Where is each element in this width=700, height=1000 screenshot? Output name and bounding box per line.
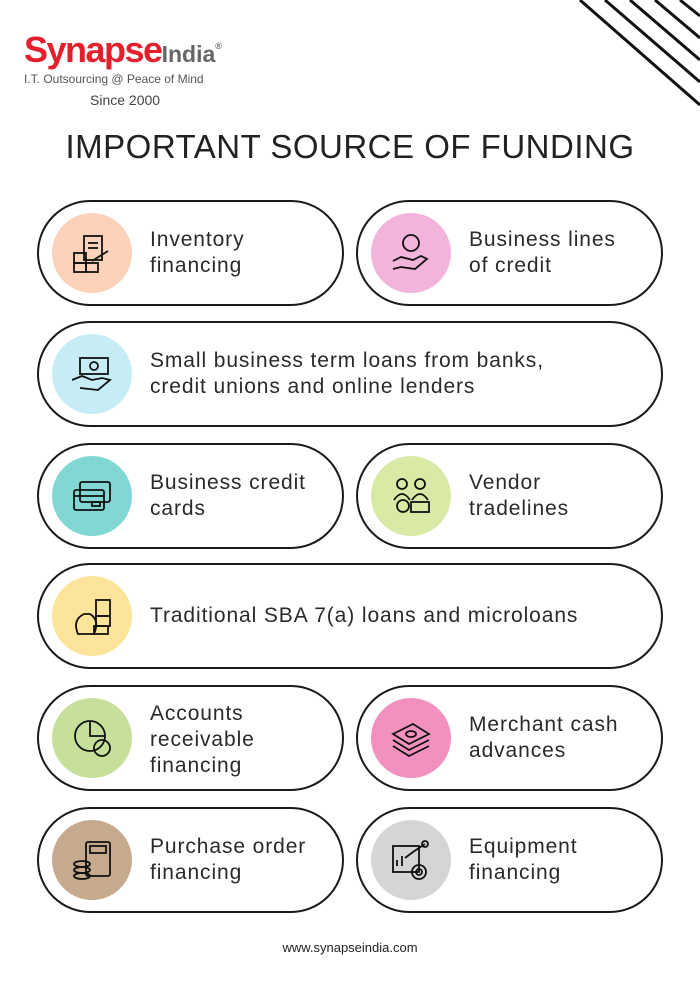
- text: [150, 228, 244, 277]
- logo: SynapseIndia®: [24, 29, 220, 70]
- text: receivable: [150, 728, 255, 751]
- text: Merchant cash: [469, 713, 618, 736]
- decorative diagonal lines: [579, 0, 700, 106]
- panel: small business term loans: [37, 321, 663, 427]
- panel: equipment financing: [356, 807, 663, 913]
- panel: accounts receivable financing: [37, 685, 344, 791]
- text: financing: [150, 861, 242, 884]
- text: Equipment: [469, 835, 578, 858]
- logo: I.T. Outsourcing @ Peace of Mind: [24, 72, 204, 86]
- text: [469, 471, 569, 520]
- text: Accounts: [150, 702, 244, 725]
- icon: cash stack: [371, 698, 451, 778]
- text: Traditional SBA 7(a) loans and microloans: [150, 604, 578, 627]
- text: Small business term loans from banks,: [150, 349, 544, 372]
- icon: pie chart: [52, 698, 132, 778]
- icon: cash hand: [52, 334, 132, 414]
- title: IMPORTANT SOURCE OF FUNDING: [65, 128, 635, 165]
- text: [150, 835, 306, 884]
- text: [469, 228, 616, 277]
- panel: merchant cash advances: [356, 685, 663, 791]
- text: Inventory: [150, 228, 244, 251]
- text: financing: [469, 861, 561, 884]
- panel: vendor tradelines: [356, 443, 663, 549]
- text: Business credit: [150, 471, 306, 494]
- text: Business lines: [469, 228, 616, 251]
- panel: purchase order financing: [37, 807, 344, 913]
- text: advances: [469, 739, 566, 762]
- text: [469, 835, 578, 884]
- text: financing: [150, 254, 242, 277]
- logo: Since 2000: [90, 92, 160, 108]
- icon: hand coin: [371, 213, 451, 293]
- text: Vendor: [469, 471, 541, 494]
- text: [469, 713, 618, 762]
- icon: inventory: [52, 213, 132, 293]
- panel: inventory financing: [37, 200, 344, 306]
- text: tradelines: [469, 497, 569, 520]
- text: financing: [150, 754, 242, 777]
- icon: cards: [52, 456, 132, 536]
- icon: money bag: [52, 576, 132, 656]
- text: [150, 471, 306, 520]
- text: credit unions and online lenders: [150, 375, 475, 398]
- text: [150, 349, 544, 398]
- icon: equipment chart: [371, 820, 451, 900]
- text: [150, 702, 255, 777]
- icon: vendors: [371, 456, 451, 536]
- text: of credit: [469, 254, 552, 277]
- footer url: www.synapseindia.com: [282, 940, 418, 955]
- text: cards: [150, 497, 206, 520]
- panel: business lines of credit: [356, 200, 663, 306]
- text: Purchase order: [150, 835, 306, 858]
- panel: SBA loans: [37, 563, 663, 669]
- panel: business credit cards: [37, 443, 344, 549]
- icon: calculator coins: [52, 820, 132, 900]
- logo: [24, 29, 222, 108]
